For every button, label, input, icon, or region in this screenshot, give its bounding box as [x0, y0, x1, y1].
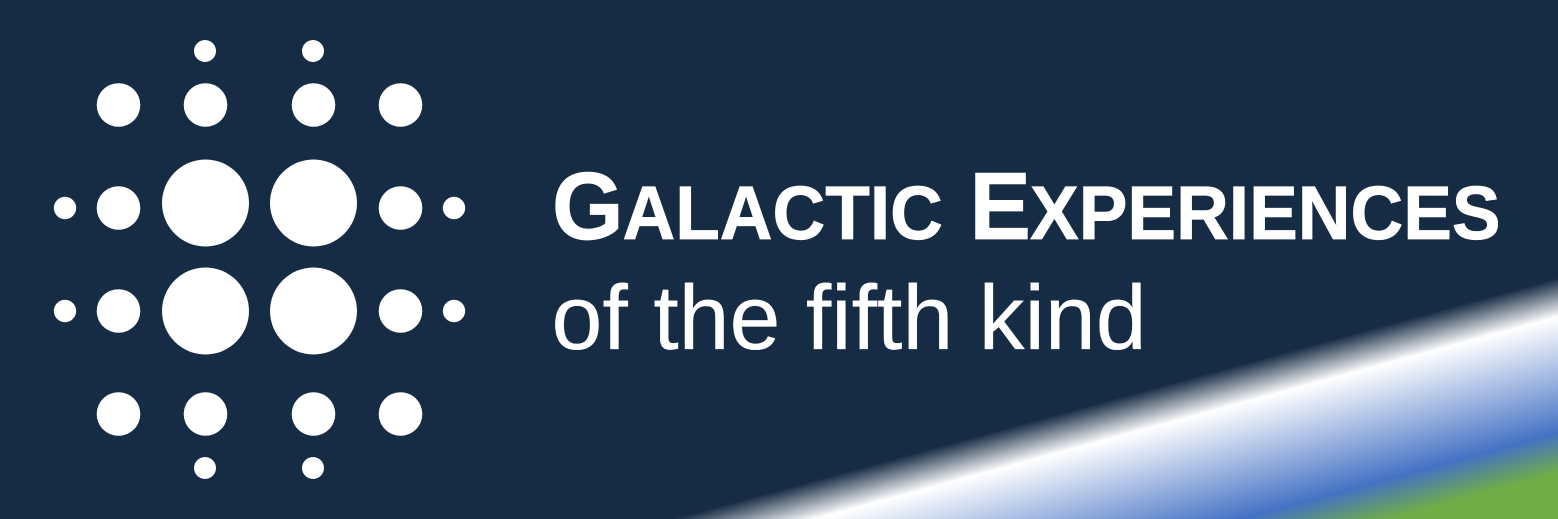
title: Galactic Experiences: XPERIENCES — [1030, 171, 1501, 256]
subtitle: of the fifth kind: of the fifth kind — [552, 267, 1147, 369]
title: Galactic Experiences: E — [970, 154, 1031, 260]
title: Galactic Experiences: ALACTIC — [622, 171, 963, 256]
title: Galactic Experiences: G — [552, 154, 624, 260]
diagonal gradient swoosh — [672, 278, 1558, 519]
logo: radial dot grid — [54, 40, 465, 479]
